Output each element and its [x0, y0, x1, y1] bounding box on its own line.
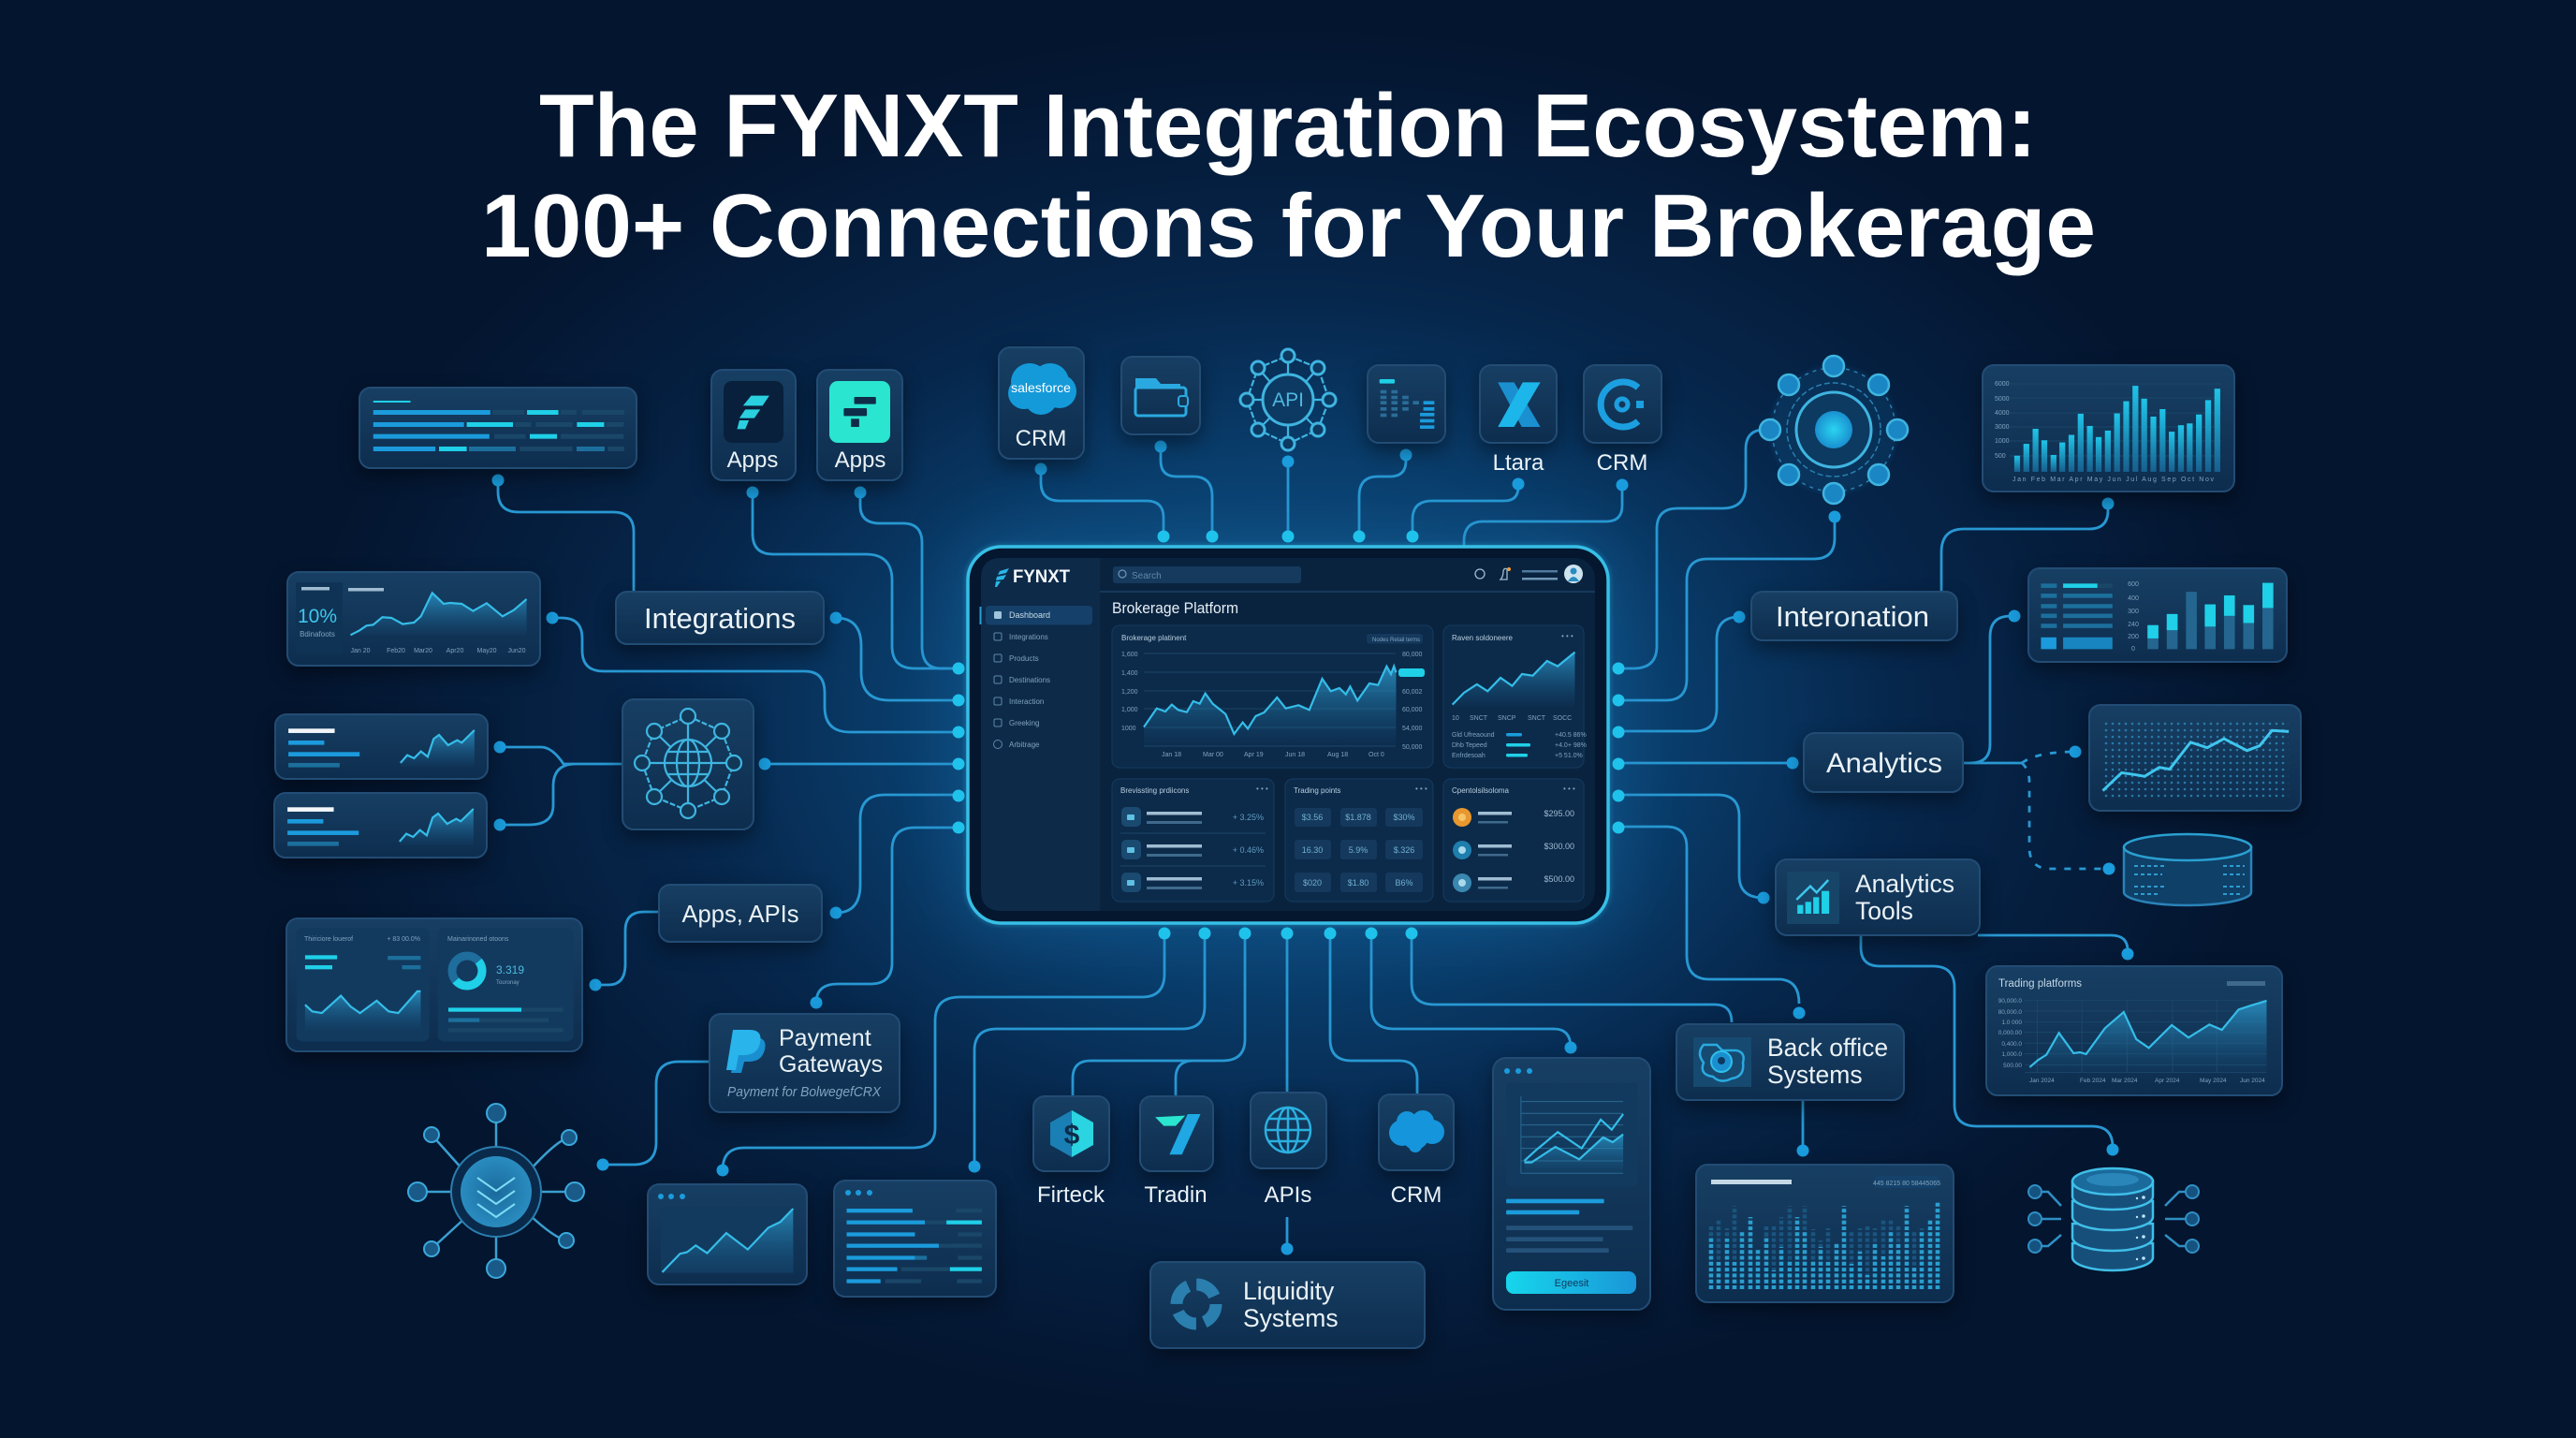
- card: Trading platforms chart: Jun 2024: [2240, 1078, 2265, 1084]
- label: Analytics: [1804, 733, 1963, 792]
- panel: trading points: $30%: [1393, 813, 1415, 822]
- connector: globe to platform: [758, 758, 959, 770]
- connector: Analytics to stacked chart: [1963, 610, 2022, 763]
- chart panel: revenue summary: Enfrdesoah: [1452, 753, 1486, 759]
- panel: trading points: $.326: [1394, 845, 1414, 855]
- card: Payment Gateways: [710, 1014, 900, 1112]
- icon: liquidity ring: [1177, 1284, 1216, 1324]
- card: ten percent chart: Apr20: [446, 648, 463, 654]
- sidebar navigation: Arbitrage: [1009, 741, 1040, 749]
- card: ten percent chart: Feb20: [387, 648, 405, 654]
- button: Egeesit: [1506, 1271, 1636, 1294]
- card: salesforce CRM: [999, 347, 1084, 459]
- label: Apps, APIs: [659, 885, 822, 942]
- icon: back office gears: [1693, 1037, 1751, 1087]
- card: stacked bar chart: 400: [2128, 595, 2139, 602]
- connector: Apps APIs to double chart: [590, 912, 659, 990]
- card: stacked bar chart: 300: [2128, 609, 2139, 615]
- card: Fintech icon: $: [1064, 1120, 1080, 1151]
- label: Integrations: [616, 592, 824, 644]
- card: Apps 1: [711, 370, 796, 480]
- icon: glowing node network: [1760, 356, 1908, 504]
- icon: hub network: [408, 1104, 584, 1278]
- connector: dashed to dot chart and cylinder: [2022, 745, 2115, 874]
- connector: table card to Integrations: [492, 474, 634, 593]
- chart panel: brokerage platform line chart: 1,600: [1121, 652, 1138, 658]
- card: Trading platforms chart: Mar 2024: [2112, 1078, 2138, 1084]
- panel: brokering products: Brevissting prdiicons: [1120, 786, 1189, 795]
- connector: platform bottom to Back office: [1412, 933, 1732, 1022]
- card: gantt table: [359, 388, 637, 468]
- connector: platform bottom to list card: [968, 933, 1205, 1172]
- card: Payment Gateways: Gateways: [779, 1051, 883, 1078]
- card: ten percent chart: 10%: [298, 606, 337, 627]
- title: [481, 76, 2096, 276]
- panel: brokering products: + 3.15%: [1233, 878, 1264, 888]
- connector: platform bottom to phone card: [1371, 933, 1576, 1054]
- card: stacked bar chart: 200: [2128, 634, 2139, 640]
- card: Payment Gateways: Payment for BolwegefCRX: [727, 1084, 882, 1100]
- card: ten percent chart: Jan 20: [350, 648, 371, 654]
- card: double dashboard: 3.319: [496, 963, 524, 976]
- card: Fintech icon: [1033, 1096, 1109, 1171]
- card: bar chart: Jan Feb Mar Apr May Jun Jul Aug Sep Oct Nov: [2012, 477, 2215, 483]
- connector: Payment Gateways to platform: [811, 828, 959, 1009]
- panel: control solutions: [1443, 779, 1584, 902]
- connector: Apps APIs to platform: [829, 795, 959, 919]
- card: dotted line chart: [2089, 705, 2301, 811]
- card: Trading platforms chart: Jan 2024: [2029, 1078, 2055, 1084]
- card: Trading platforms chart: 0,000.00: [1998, 1030, 2022, 1036]
- button: Egeesit: Egeesit: [1555, 1278, 1588, 1289]
- card: Liquidity Systems: [1150, 1262, 1425, 1348]
- card: Back office Systems: [1676, 1024, 1904, 1100]
- labels: bottom icon row: [1037, 1182, 1442, 1208]
- card: X icon: [1480, 365, 1557, 443]
- chart panel: brokerage platform line chart: 1,200: [1121, 689, 1138, 696]
- icon: teal F mark: [829, 381, 890, 443]
- sidebar navigation: Dashboard: [1009, 610, 1050, 620]
- card: small chart 1: [275, 714, 488, 779]
- chart panel: brokerage platform line chart: 1,000: [1121, 707, 1138, 713]
- connector: Payment Gateways to hub: [597, 1062, 710, 1170]
- connector: ten percent chart to platform: [547, 612, 959, 732]
- card: ten percent chart: Mar20: [414, 648, 432, 654]
- chart panel: revenue summary: +4.0+ 98%: [1555, 742, 1587, 749]
- card: double dashboard: + 83 00.0%: [387, 936, 420, 943]
- icon: API network: [1240, 349, 1336, 450]
- chart panel: brokerage platform line chart: Jan 18: [1162, 752, 1181, 758]
- card: stacked bar chart: [2028, 568, 2287, 662]
- label: Apps, APIs: Apps, APIs: [681, 900, 799, 928]
- icon: data cylinder: [2124, 834, 2251, 905]
- panel: control solutions: $300.00: [1544, 842, 1574, 851]
- panel: control solutions: $500.00: [1544, 874, 1574, 884]
- sidebar navigation: Integrations: [1009, 633, 1048, 641]
- title: The FYNXT Integration Ecosystem:: [539, 76, 2037, 176]
- card: list table: [834, 1181, 996, 1297]
- card: bar chart: [1983, 365, 2234, 492]
- chart panel: brokerage platform line chart: 1,400: [1121, 670, 1138, 677]
- chart panel: revenue summary: Raven soldoneere: [1452, 634, 1513, 642]
- panel: trading points: $3.56: [1302, 813, 1323, 822]
- panel: control solutions: Cpentolsilsoloma: [1452, 786, 1509, 795]
- search bar: [1113, 566, 1301, 583]
- chart panel: brokerage platform line chart: Jun 18: [1285, 752, 1305, 758]
- connector: wallet to platform: [1155, 440, 1212, 536]
- title: 100+ Connections for Your Brokerage: [481, 176, 2096, 276]
- label: Integrations: Integrations: [644, 602, 796, 635]
- chart panel: revenue summary: • • •: [1561, 632, 1573, 640]
- chart panel: revenue summary: +5 51.0%: [1555, 753, 1583, 759]
- connector: Apps card 1 to platform: [747, 487, 959, 668]
- chart panel: brokerage platform line chart: [1112, 625, 1433, 768]
- chart panel: brokerage platform line chart: Oct 0: [1368, 752, 1384, 758]
- icon: rising bars: [1787, 872, 1839, 924]
- card: bar chart: 1000: [1995, 438, 2010, 445]
- card: Back office Systems: Back office: [1767, 1034, 1888, 1062]
- chart panel: brokerage platform line chart: Brokerage platinent: [1121, 634, 1187, 642]
- label: Interonation: [1751, 592, 1957, 640]
- card: Analytics Tools: Tools: [1855, 897, 1913, 925]
- chart panel: revenue summary: Gld Ufreaound: [1452, 732, 1495, 739]
- panel: trading points: $1.80: [1348, 878, 1368, 888]
- card: Trading platforms chart: 80,000.0: [1998, 1009, 2022, 1016]
- card: dotted bars chart: 445 8215 80 58445065: [1873, 1181, 1940, 1187]
- search bar: Search: [1132, 571, 1162, 581]
- card: Payment Gateways: Payment: [779, 1025, 871, 1051]
- icon: API network: API: [1272, 389, 1304, 411]
- card: Liquidity Systems: Systems: [1243, 1304, 1339, 1332]
- connector: API to platform: [1282, 455, 1294, 536]
- card: Trading platforms chart: 1,000.0: [2001, 1051, 2022, 1058]
- panel: brokering products: + 0.46%: [1233, 845, 1264, 855]
- card: dotted bars chart: [1696, 1165, 1954, 1302]
- chart panel: revenue summary: SNCT: [1528, 715, 1546, 722]
- card: line chart window: [648, 1184, 807, 1284]
- card: bar chart: 4000: [1995, 410, 2010, 417]
- chart panel: brokerage platform line chart: 80,000: [1402, 652, 1423, 658]
- chart panel: revenue summary: Dhb Tepeed: [1452, 742, 1487, 749]
- sidebar navigation: [979, 606, 1092, 749]
- label: Ltara: Ltara: [1493, 450, 1544, 476]
- card: Trading platforms chart: May 2024: [2200, 1078, 2227, 1084]
- card: Trading platforms chart: Feb 2024: [2080, 1078, 2106, 1084]
- chart panel: revenue summary: SNCP: [1498, 715, 1516, 722]
- card: salesforce CRM: CRM: [1016, 426, 1066, 451]
- card: Trading platforms chart: 90,000.0: [1998, 998, 2022, 1005]
- card: bar chart: 500: [1995, 453, 2006, 460]
- connector: Back office to dot bars: [1797, 1100, 1808, 1157]
- port dots: platform edges: [953, 530, 1625, 940]
- panel: trading points: 16.30: [1302, 845, 1323, 855]
- connector: salesforce CRM to platform: [1035, 462, 1164, 536]
- chart panel: brokerage platform line chart: Apr 19: [1244, 752, 1264, 758]
- card: double dashboard: Thiriciore louerof: [304, 936, 353, 943]
- labels: bottom icon row: APIs: [1265, 1182, 1311, 1208]
- icon: payment mark: [726, 1030, 766, 1073]
- connector: Interonation to bar chart: [1941, 498, 2114, 592]
- card: C icon: [1584, 365, 1661, 443]
- card: data table icon: [1368, 365, 1445, 443]
- connector: platform bottom to chart card: [717, 933, 1164, 1176]
- panel: brokering products: + 3.25%: [1233, 813, 1264, 822]
- card: Back office Systems: Systems: [1767, 1061, 1863, 1089]
- card: bar chart: 3000: [1995, 424, 2010, 431]
- panel glow: [955, 534, 1621, 936]
- sidebar navigation: Products: [1009, 654, 1039, 663]
- connector: Analytics Tools to platform: [1618, 795, 1769, 904]
- chart panel: brokerage platform line chart: Nodes Retail terms: [1372, 638, 1420, 643]
- card: double dashboard: [286, 918, 582, 1051]
- connector: APIs to Liquidity Systems: [1281, 1217, 1294, 1255]
- card: stacked bar chart: 600: [2128, 581, 2139, 588]
- connector: Interonation to platform: [1618, 610, 1745, 731]
- card: globe network icon: [622, 699, 754, 829]
- labels: bottom icon row: CRM: [1391, 1182, 1442, 1208]
- connector: CRM top to platform: [1464, 479, 1629, 547]
- connector: Back office to platform: [1618, 827, 1805, 1019]
- card: Trading platforms chart: [1986, 966, 2282, 1095]
- card: stacked bar chart: 240: [2128, 622, 2139, 628]
- chart panel: revenue summary: [1443, 625, 1587, 768]
- connector: Apps card 2 to platform: [854, 487, 959, 668]
- chart panel: brokerage platform line chart: Aug 18: [1327, 752, 1348, 758]
- card: CRM cloud icon: [1379, 1094, 1454, 1170]
- panel: Brokerage Platform dashboard: [968, 547, 1608, 923]
- card: wallet icon: [1121, 357, 1200, 434]
- card: ten percent chart: Jun20: [507, 648, 526, 654]
- chart panel: revenue summary: SOCC: [1553, 715, 1572, 722]
- heading: Brokerage Platform: Brokerage Platform: [1112, 599, 1238, 617]
- panel: brokering products: [1112, 779, 1274, 902]
- panel: trading points: 5.9%: [1349, 845, 1368, 855]
- icon: dark F mark: [724, 381, 783, 443]
- card: double dashboard: Mainarinoned otoons: [447, 936, 509, 943]
- card: Analytics Tools: [1776, 859, 1980, 935]
- panel: trading points: [1285, 779, 1433, 902]
- icon: database with connectors: [2028, 1168, 2199, 1270]
- card: Trading platforms chart: Trading platforms: [1998, 978, 2082, 990]
- header tools: [1475, 565, 1583, 583]
- label: CRM top: CRM: [1597, 450, 1647, 476]
- panel: trading points: $1.878: [1345, 813, 1371, 822]
- connector: Analytics Tools to database: [1861, 935, 2119, 1155]
- panel: control solutions: $295.00: [1544, 809, 1574, 818]
- chart panel: brokerage platform line chart: Mar 00: [1203, 752, 1223, 758]
- chart panel: revenue summary: +40.5 86%: [1555, 732, 1587, 739]
- card: ten percent chart: [287, 572, 540, 666]
- connector: platform bottom to Fintech and Trading: [1073, 933, 1245, 1097]
- panel: trading points: Trading points: [1294, 786, 1340, 795]
- panel: trading points: • • •: [1415, 785, 1427, 793]
- connector: Analytics to platform: [1618, 756, 1799, 770]
- chart panel: brokerage platform line chart: 60,000: [1402, 707, 1423, 713]
- brand: FYNXT logo: FYNXT: [1013, 567, 1070, 587]
- labels: bottom icon row: Tradin: [1144, 1182, 1208, 1208]
- sidebar navigation: Interaction: [1009, 697, 1044, 706]
- card: Trading icon: [1140, 1096, 1213, 1171]
- connector: network bottom to platform: [1618, 511, 1840, 700]
- connector: platform bottom to APIs: [1286, 933, 1288, 1093]
- chart panel: brokerage platform line chart: 60,002: [1402, 689, 1423, 696]
- panel: trading points: $020: [1303, 878, 1322, 888]
- card: APIs globe icon: [1251, 1093, 1326, 1168]
- connector: small charts to globe: [494, 741, 622, 831]
- sidebar navigation: Greeking: [1009, 719, 1039, 727]
- chart panel: brokerage platform line chart: 1000: [1121, 726, 1136, 732]
- card: Apps 1: Apps: [727, 448, 778, 473]
- card: Apps 2: [817, 370, 902, 480]
- card: Trading platforms chart: 1.0 000: [2001, 1020, 2022, 1026]
- card: ten percent chart: May20: [476, 648, 497, 654]
- chart panel: brokerage platform line chart: 54,000: [1402, 726, 1423, 732]
- card: small chart 2: [274, 793, 487, 858]
- connector: platform bottom to CRM: [1330, 933, 1417, 1095]
- panel: brokering products: • • •: [1256, 785, 1268, 793]
- card: Trading platforms chart: 0,400.0: [2001, 1041, 2022, 1048]
- card: double dashboard: Touronay: [496, 980, 520, 986]
- card: Analytics Tools: Analytics: [1855, 870, 1954, 898]
- card: stacked bar chart: 0: [2131, 646, 2135, 653]
- card: Liquidity Systems: Liquidity: [1243, 1277, 1335, 1305]
- connector: platform to top-right network: [1618, 430, 1764, 668]
- sidebar navigation: Destinations: [1009, 676, 1050, 684]
- panel: control solutions: • • •: [1563, 785, 1575, 793]
- label: Analytics: Analytics: [1826, 748, 1942, 779]
- connector: Analytics Tools to trading chart: [1978, 935, 2134, 961]
- label: Interonation: Interonation: [1776, 600, 1929, 633]
- chart panel: revenue summary: 10: [1452, 715, 1459, 722]
- card: bar chart: 6000: [1995, 381, 2010, 388]
- labels: bottom icon row: Firteck: [1037, 1182, 1105, 1208]
- card: Trading platforms chart: Apr 2024: [2155, 1078, 2180, 1084]
- card: Trading platforms chart: 500.00: [2003, 1063, 2022, 1069]
- panel: trading points: B6%: [1395, 878, 1413, 888]
- icon: salesforce cloud: salesforce: [1011, 380, 1071, 395]
- card: mobile chart with button: [1493, 1058, 1650, 1310]
- connector: Integrations to platform: [829, 612, 959, 700]
- chart panel: brokerage platform line chart: 50,000: [1402, 744, 1423, 751]
- connector: table icon to platform: [1359, 449, 1412, 536]
- connector: Ltara to platform: [1412, 477, 1524, 536]
- card: bar chart: 5000: [1995, 396, 2010, 403]
- card: Apps 2: Apps: [835, 448, 886, 473]
- card: ten percent chart: Bdinafoots: [300, 630, 335, 638]
- chart panel: revenue summary: SNCT: [1470, 715, 1488, 722]
